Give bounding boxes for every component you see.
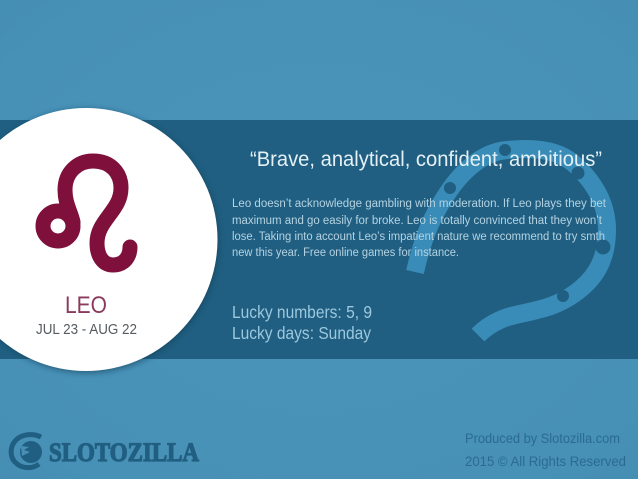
heading: quote: “Brave, analytical, confident, ambitious” — [250, 147, 602, 171]
panel: dark band — [0, 120, 638, 359]
sign dates: JUL 23 - AUG 22 — [36, 322, 137, 338]
text block: description: new this year. Free online games for instance. — [232, 247, 459, 259]
text block: credits: 2015 © All Rights Reserved — [465, 453, 626, 469]
text block: credits: Produced by Slotozilla.com — [465, 430, 620, 446]
text block: lucky info: Lucky days: Sunday — [232, 323, 371, 343]
panel: sign circle — [0, 108, 219, 373]
text block: lucky info — [232, 302, 372, 343]
logo: slotozilla — [11, 435, 199, 468]
icon: leo glyph — [43, 161, 130, 265]
text block: description — [232, 198, 607, 259]
sign name: LEO — [65, 292, 107, 319]
text block: description: maximum and go easily for broke. Leo is totally convinced that they won’t — [232, 215, 603, 227]
text block: lucky info: Lucky numbers: 5, 9 — [232, 302, 372, 322]
logo wordmark: SLOTOZILLA — [49, 438, 199, 467]
text block: description: Leo doesn’t acknowledge gambling with moderation. If Leo plays they bet — [232, 198, 607, 210]
icon: dragon — [11, 435, 42, 468]
icon: horseshoe — [415, 144, 610, 335]
text block: credits — [465, 430, 626, 469]
text block: description: lose. Taking into account Leo’s impatient nature we recommend to try smth — [232, 231, 605, 243]
